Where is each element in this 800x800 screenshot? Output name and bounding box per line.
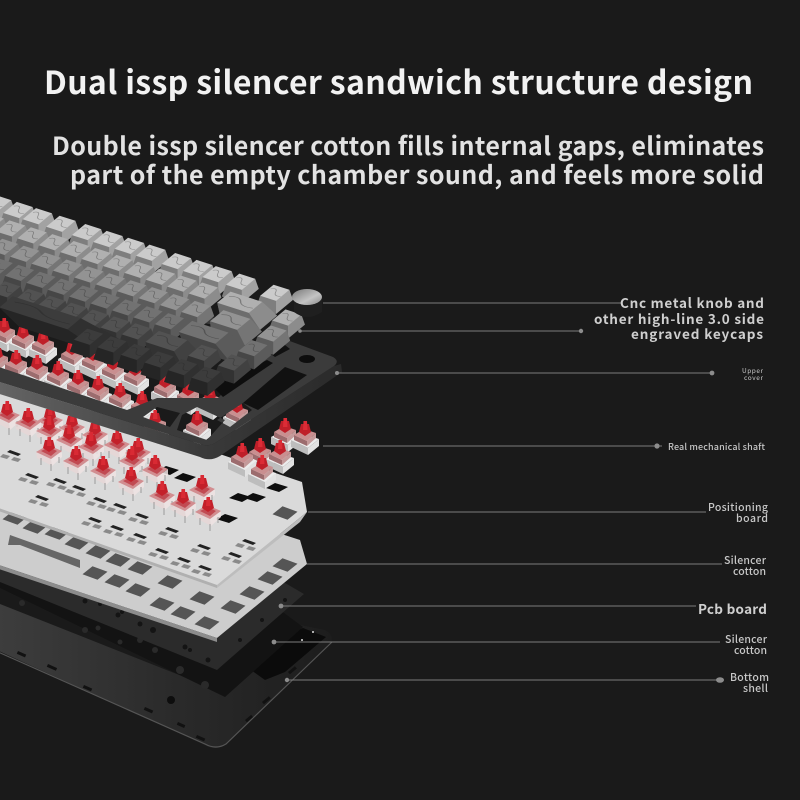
layer: positioning board <box>0 376 307 588</box>
label: upper cover <box>742 365 763 382</box>
icon: cnc metal knob <box>292 289 322 317</box>
label: real mechanical shaft: Real mechanical shaft <box>668 440 765 453</box>
title: Dual issp silencer sandwich structure design <box>44 58 753 104</box>
label: bottom shell: Bottom <box>730 670 769 685</box>
subtitle <box>52 127 764 192</box>
layer: upper cover frame <box>0 250 342 459</box>
keycap row 3 <box>0 232 298 355</box>
label: bottom shell: shell <box>743 681 768 696</box>
label: silencer cotton lower <box>725 632 768 658</box>
label: knob and keycaps <box>594 292 764 343</box>
label: knob and keycaps: Cnc metal knob and <box>620 292 764 312</box>
label: silencer cotton upper <box>724 553 767 579</box>
keycap row 2 <box>0 213 313 339</box>
layer: pcb board <box>0 500 304 670</box>
label: silencer cotton lower: Silencer <box>725 632 768 647</box>
label: upper cover: cover <box>744 372 763 382</box>
label: positioning board <box>708 500 768 526</box>
layer: keycaps <box>0 195 334 400</box>
layer: mechanical switches <box>0 318 319 531</box>
keycap row 5 <box>0 281 259 384</box>
subtitle: Double issp silencer cotton fills internal gaps, eliminates <box>52 127 764 163</box>
label: knob and keycaps: other high-line 3.0 side <box>594 308 764 328</box>
label: knob and keycaps: engraved keycaps <box>631 323 763 343</box>
label: upper cover: Upper <box>742 365 763 375</box>
subtitle: part of the empty chamber sound, and feels more solid <box>70 156 764 192</box>
layer: bottom shell <box>0 600 332 748</box>
label: positioning board: Positioning <box>708 500 768 515</box>
leader lines and dots <box>272 303 724 683</box>
label: positioning board: board <box>736 511 768 526</box>
label: silencer cotton upper: cotton <box>733 564 766 579</box>
layer: silencer cotton plate <box>0 440 307 642</box>
label: silencer cotton upper: Silencer <box>724 553 767 568</box>
keycap row 1 <box>0 195 301 314</box>
keycap row 6 <box>0 296 239 396</box>
keycap row 4 <box>0 258 279 369</box>
label: bottom shell <box>730 670 769 696</box>
label: silencer cotton lower: cotton <box>734 643 767 658</box>
layer: lower silencer cotton <box>0 520 303 697</box>
label: pcb board: Pcb board <box>698 598 767 618</box>
